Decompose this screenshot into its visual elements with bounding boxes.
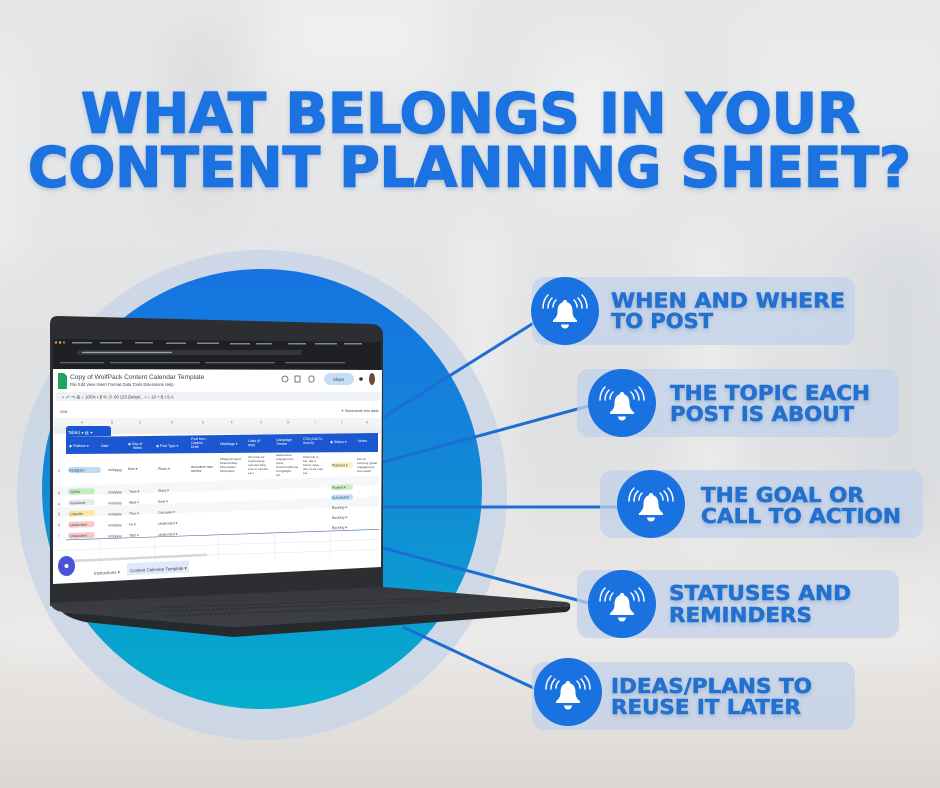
background circle ring bbox=[17, 250, 507, 740]
callout: when and where to post bbox=[531, 277, 855, 345]
data rows: 6 bbox=[58, 523, 60, 527]
spreadsheet table: any) bbox=[248, 443, 255, 447]
data rows: TikTok bbox=[70, 490, 80, 494]
spreadsheet table: Caption bbox=[191, 441, 203, 445]
sheet header: File Edit View Insert Format Data Tools Extensions Help bbox=[70, 382, 174, 387]
row 2 text: #Innovation bbox=[220, 465, 236, 469]
spreadsheet table: K bbox=[366, 420, 369, 424]
laptop base bbox=[50, 587, 570, 637]
title: WHAT BELONGS IN YOUR bbox=[81, 82, 860, 146]
callout: statuses and reminders: STATUSES AND bbox=[669, 581, 851, 605]
row 2 text: Click link in bbox=[303, 455, 319, 459]
data rows: Scheduled bbox=[332, 495, 349, 500]
data rows: Undecided ▾ bbox=[158, 521, 178, 526]
spreadsheet table: F bbox=[231, 420, 233, 424]
spreadsheet table: ◉ Platform ▾ bbox=[69, 444, 89, 448]
spreadsheet table: Post text / bbox=[191, 437, 207, 441]
data rows: m/d/yyyy bbox=[108, 534, 122, 539]
data rows: Backlog ▾ bbox=[332, 525, 347, 530]
callout: ideas and plans to reuse it later bbox=[532, 658, 855, 730]
row 2 text: etc. bbox=[303, 471, 308, 475]
spreadsheet table: E bbox=[202, 420, 204, 424]
data rows: m/d/yyyy bbox=[108, 501, 122, 506]
row 2 text: repurposing, bbox=[248, 459, 265, 463]
connector lines bbox=[383, 319, 622, 691]
sheet header: ✦ Summarize this table bbox=[341, 409, 379, 413]
blue header row bbox=[66, 433, 378, 454]
row 2 text: Mon ▾ bbox=[128, 467, 138, 471]
row 2 text: post to include bbox=[248, 467, 268, 471]
data rows: Backlog ▾ bbox=[332, 515, 347, 520]
data rows: LinkedIn bbox=[70, 512, 83, 516]
spreadsheet screen bbox=[53, 369, 382, 584]
spreadsheet table: ◉ Post Type ▾ bbox=[156, 444, 178, 448]
row 2 text: Fill out bbox=[357, 457, 366, 461]
spreadsheet table: B bbox=[111, 420, 113, 424]
spreadsheet table: Hashtags ▾ bbox=[220, 442, 238, 446]
data rows: Tues ▾ bbox=[129, 489, 140, 494]
sheet header: Copy of WolfPack Content Calendar Template bbox=[70, 374, 205, 381]
spreadsheet table: CTA (Call To bbox=[303, 437, 322, 441]
data rows: Wed ▾ bbox=[129, 500, 139, 505]
row 2 text: friend, save bbox=[303, 463, 319, 467]
callout: the topic each post is about: THE TOPIC EACH bbox=[670, 381, 870, 405]
data rows: Undecided bbox=[70, 523, 87, 527]
data rows: m/d/yyyy bbox=[108, 523, 122, 528]
browser bar bbox=[53, 339, 381, 371]
row 2 text: this, book now bbox=[303, 467, 324, 471]
bottom sheet tabs: Instructions ▾ bbox=[94, 570, 120, 576]
spreadsheet table: Date bbox=[101, 444, 108, 448]
row 2 text: Awareness, bbox=[276, 453, 292, 457]
row 2 text bbox=[58, 453, 377, 477]
callout: ideas and plans to reuse it later: IDEAS/PLANS TO bbox=[611, 674, 812, 698]
data rows: Undecided bbox=[70, 534, 87, 538]
assistant button bbox=[58, 556, 75, 576]
sheet header: Share bbox=[333, 377, 345, 382]
callout: the topic each post is about bbox=[577, 369, 899, 437]
bottom sheet tabs bbox=[72, 554, 207, 578]
spreadsheet table: A bbox=[81, 420, 84, 424]
row 2 text: etc.) bbox=[248, 471, 254, 475]
laptop lid bbox=[50, 316, 383, 606]
data rows: 7 bbox=[58, 534, 60, 538]
row 2 text: #Shoptiker bbox=[220, 469, 235, 473]
data rows: Story ▾ bbox=[158, 488, 169, 493]
spreadsheet table: I bbox=[315, 420, 316, 424]
row 2 text: relevant blog bbox=[248, 463, 266, 467]
sheet header: ⌕ ↶ ↷ ⎙ ⌂ 100% ▾ $ % .0 .00 123 Defaul... ▾ − 10 + B I S A bbox=[62, 394, 174, 400]
row 2 text: Instagram bbox=[69, 468, 85, 472]
callout: the goal or call to action: THE GOAL OR bbox=[701, 483, 864, 507]
callout: the goal or call to action: CALL TO ACTION bbox=[701, 504, 901, 528]
row 2 text: etc. bbox=[276, 473, 281, 477]
spreadsheet table: Week bbox=[133, 446, 142, 450]
row 2 text: Announce new bbox=[191, 465, 213, 469]
row 2 text: m/d/yyyy bbox=[108, 468, 122, 472]
sheet header bbox=[55, 373, 381, 414]
callout: ideas and plans to reuse it later: REUSE IT LATER bbox=[611, 695, 801, 719]
spreadsheet table: ◉ Status ▾ bbox=[330, 440, 347, 444]
data rows: Backlog ▾ bbox=[332, 505, 347, 510]
data rows: TBD ▾ bbox=[129, 533, 139, 538]
row 2 text: low reach) bbox=[357, 469, 371, 473]
spreadsheet table: Campaign bbox=[276, 438, 292, 442]
data rows: Thur ▾ bbox=[129, 511, 139, 516]
spreadsheet table: H bbox=[287, 420, 290, 424]
row 2 text: morning (great bbox=[357, 461, 377, 465]
data rows: 4 bbox=[58, 502, 60, 506]
data rows: m/d/yyyy bbox=[108, 512, 122, 517]
blue gradient circle bbox=[42, 269, 482, 709]
bottom sheet tabs: Content Calendar Template ▾ bbox=[130, 566, 187, 573]
row 2 text: engagement, bbox=[276, 457, 294, 461]
spreadsheet table: Theme bbox=[276, 442, 287, 446]
callout: when and where to post: TO POST bbox=[611, 309, 713, 333]
spreadsheet table: G bbox=[260, 420, 263, 424]
spreadsheet table: Notes bbox=[358, 439, 367, 443]
row 2 text: trend, bbox=[276, 461, 284, 465]
data rows: 5 bbox=[58, 512, 60, 516]
spreadsheet table bbox=[54, 418, 381, 578]
data rows: Reel ▾ bbox=[158, 499, 168, 504]
row 2 text: 2 bbox=[58, 469, 60, 473]
callout: when and where to post: WHEN AND WHERE bbox=[611, 288, 845, 312]
row 2 text: Photo ▾ bbox=[158, 467, 170, 471]
row 2 text: customer/theme bbox=[276, 465, 298, 469]
spreadsheet table: C bbox=[139, 420, 142, 424]
callout: statuses and reminders bbox=[577, 570, 899, 638]
data rows: Posted ▾ bbox=[332, 485, 346, 490]
data rows: Undecided ▾ bbox=[158, 532, 178, 537]
row 2 text: Planned ▾ bbox=[332, 464, 348, 468]
spreadsheet table: Action) bbox=[303, 441, 314, 445]
spreadsheet table: ◉ Day of bbox=[128, 442, 142, 446]
data rows: Fri ▾ bbox=[129, 523, 136, 527]
sheets icon bbox=[58, 373, 67, 389]
row 2 text: bio, tag a bbox=[303, 459, 316, 463]
row 2 text: #HappyProduct bbox=[220, 457, 241, 461]
callout: the topic each post is about: POST IS ABOUT bbox=[670, 402, 854, 426]
title: CONTENT PLANNING SHEET? bbox=[28, 136, 911, 200]
data rows: Facebook bbox=[70, 501, 86, 505]
row 2 text: engagement, bbox=[357, 465, 375, 469]
spreadsheet table: J bbox=[341, 420, 343, 424]
spreadsheet table: D bbox=[171, 420, 174, 424]
laptop bbox=[50, 277, 923, 730]
callout: the goal or call to action bbox=[600, 470, 923, 538]
data rows: 3 bbox=[58, 491, 60, 495]
spreadsheet table: Draft bbox=[191, 445, 199, 449]
sheet header: N16 bbox=[60, 409, 68, 414]
spreadsheet table: Links (if bbox=[248, 439, 260, 443]
row 2 text: to highlight bbox=[276, 469, 291, 473]
title bbox=[28, 82, 911, 200]
callout: statuses and reminders: REMINDERS bbox=[669, 603, 812, 627]
row 2 text: #LaunchDay bbox=[220, 461, 238, 465]
row 2 text: (Pop link for bbox=[248, 455, 265, 459]
data rows: m/d/yyyy bbox=[108, 490, 122, 495]
spreadsheet table: Table1 ▾ ▤ ✦ bbox=[68, 430, 94, 435]
data rows: Carousel ▾ bbox=[158, 510, 175, 515]
data rows bbox=[54, 475, 379, 566]
row 2 text: service bbox=[191, 469, 202, 473]
table tab bbox=[66, 426, 111, 437]
